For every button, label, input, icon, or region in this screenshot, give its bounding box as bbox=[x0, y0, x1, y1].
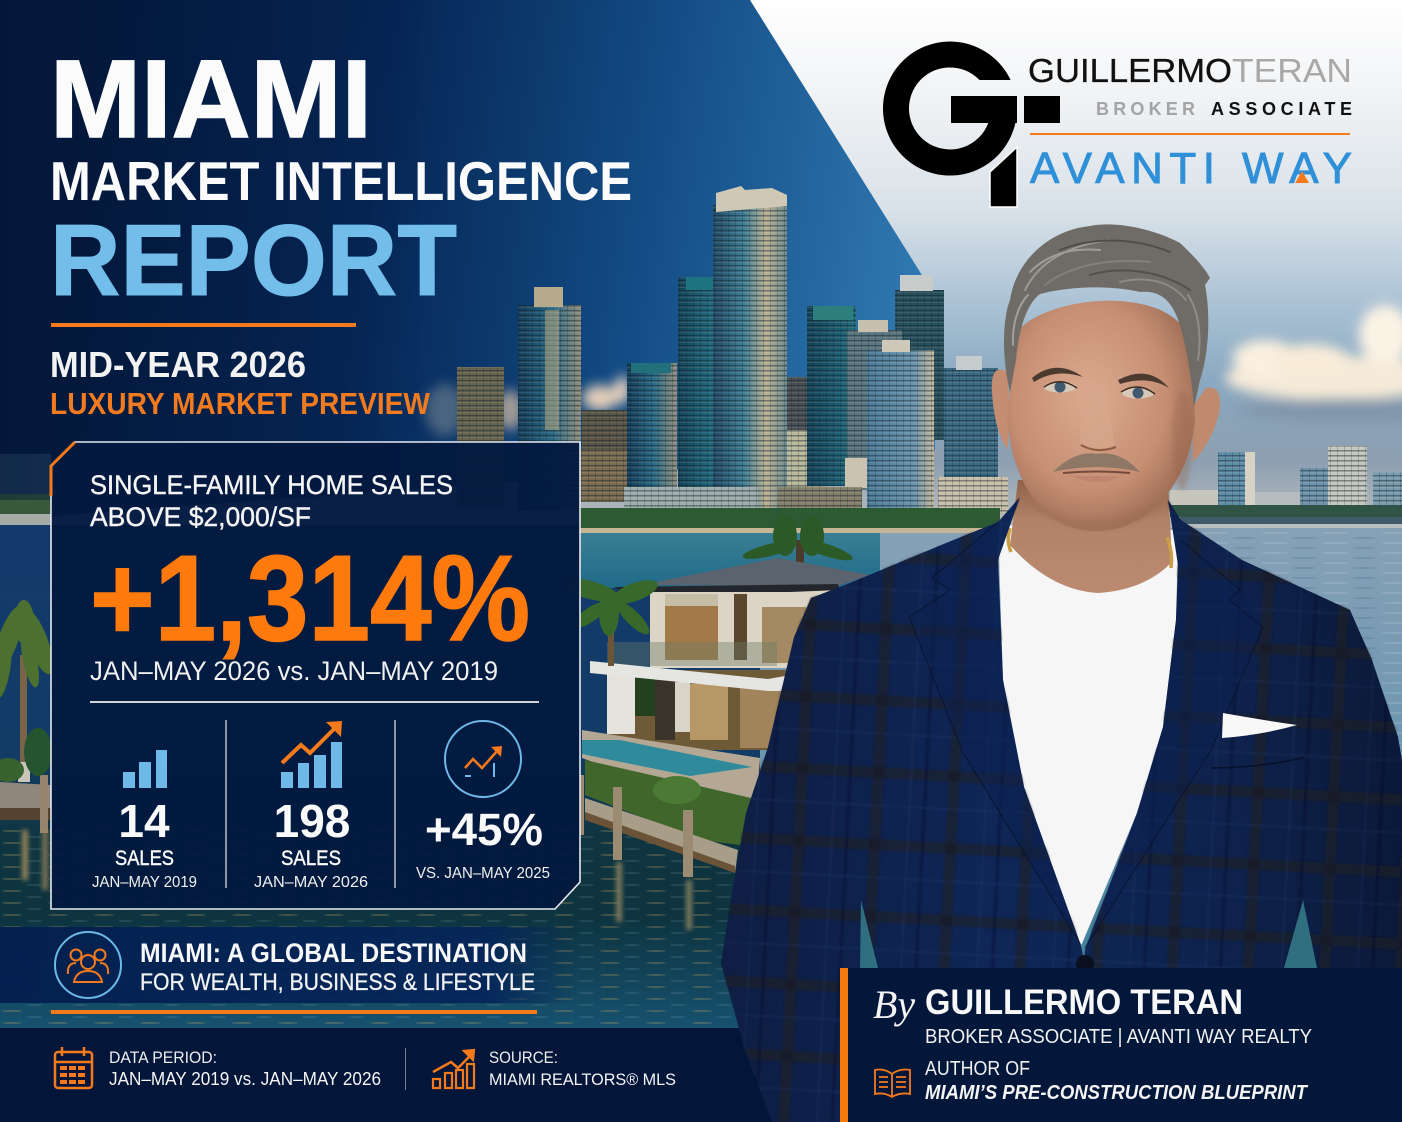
left dark overlay bbox=[0, 0, 420, 500]
clouds bbox=[425, 305, 1402, 436]
palm left of villa bbox=[559, 574, 661, 666]
pocket square bbox=[1222, 713, 1297, 738]
left ear bbox=[992, 370, 1008, 450]
logo: Guillermo Teran, Avanti Way bbox=[883, 42, 1352, 207]
sky background bbox=[0, 0, 1402, 540]
pool bbox=[582, 740, 752, 776]
distant right skyline bbox=[1170, 446, 1402, 524]
stat: 198 sales in 2026: SALES bbox=[281, 847, 341, 870]
logo mark: GT monogram bbox=[883, 42, 1060, 207]
icon: circled trend arrow bbox=[445, 721, 521, 797]
banner: global destination bbox=[0, 927, 575, 1014]
pocket line bbox=[1211, 757, 1305, 768]
panel heading line two: ABOVE $2,000/SF bbox=[90, 502, 311, 532]
waterfront villa bbox=[559, 516, 870, 877]
orange rule bbox=[51, 323, 356, 327]
logo line: associate: ASSOCIATE bbox=[1211, 99, 1352, 119]
villa roof bbox=[640, 558, 870, 586]
brows, eyes, nose and mouth bbox=[1032, 368, 1169, 482]
orange corner accent bbox=[51, 442, 75, 496]
balcony slab bbox=[590, 661, 785, 691]
left dock and palm bbox=[0, 600, 59, 833]
white t-shirt bbox=[998, 525, 1180, 946]
dock bbox=[585, 798, 738, 873]
right water ripples bbox=[1170, 530, 1402, 970]
source label: SOURCE: bbox=[489, 1048, 558, 1067]
villa upper floor bbox=[650, 590, 840, 668]
banner orange rule bbox=[51, 1010, 537, 1014]
lapels bbox=[909, 520, 1263, 948]
stat: 14 sales in 2019: 14 bbox=[118, 795, 170, 847]
water reflections bbox=[22, 830, 692, 930]
luxury preview label: LUXURY MARKET PREVIEW bbox=[50, 386, 431, 421]
author panel bbox=[840, 968, 1402, 1122]
book title: MIAMI’S PRE-CONSTRUCTION BLUEPRINT bbox=[925, 1082, 1309, 1104]
villa lower floor bbox=[607, 670, 797, 750]
face bbox=[1007, 301, 1195, 531]
footer: data period and source bbox=[55, 1047, 676, 1090]
right ear bbox=[1192, 388, 1220, 462]
panel heading: SINGLE-FAMILY HOME SALES bbox=[90, 470, 453, 500]
author background bbox=[847, 968, 1402, 1122]
stat: 14 sales in 2019: JAN–MAY 2019 bbox=[92, 874, 197, 891]
stat: 198 sales in 2026 bbox=[254, 721, 368, 891]
garden bbox=[585, 760, 760, 845]
logo line: broker: BROKER bbox=[1096, 99, 1195, 119]
title: Miami: MIAMI bbox=[50, 38, 372, 161]
icon: small bars bbox=[123, 750, 167, 788]
author of label: AUTHOR OF bbox=[925, 1058, 1030, 1080]
author name: GUILLERMO TERAN bbox=[925, 983, 1243, 1022]
blazer left side bbox=[721, 497, 1100, 1122]
orange side bar bbox=[840, 968, 848, 1122]
author role: BROKER ASSOCIATE | AVANTI WAY REALTY bbox=[925, 1026, 1312, 1048]
facial shading bbox=[1030, 390, 1192, 530]
stat: +45 percent: VS. JAN–MAY 2025 bbox=[416, 865, 550, 882]
plaid texture bbox=[721, 497, 1100, 1122]
panel: single-family sales stats bbox=[51, 442, 580, 909]
left water bbox=[0, 525, 760, 1030]
arm gaps showing water bbox=[860, 900, 1317, 968]
logo wordmark: Teran: TERAN bbox=[1232, 52, 1352, 89]
logo accent triangle bbox=[1295, 171, 1309, 183]
banner background bbox=[0, 927, 575, 1003]
icon: group of people bbox=[55, 932, 121, 998]
logo wordmark: Way: WAY bbox=[1242, 144, 1352, 193]
skyline towers bbox=[457, 186, 1008, 525]
title: report: REPORT bbox=[50, 205, 457, 317]
portrait of man in plaid blazer bbox=[721, 224, 1402, 1122]
footer bar bbox=[0, 1028, 790, 1122]
pool deck bbox=[582, 730, 760, 798]
by script: By bbox=[873, 982, 915, 1027]
stat: 14 sales in 2019 bbox=[92, 750, 197, 891]
source value: MIAMI REALTORS® MLS bbox=[489, 1070, 676, 1089]
banner headline: MIAMI: A GLOBAL DESTINATION bbox=[140, 938, 527, 968]
right water bbox=[760, 528, 1402, 970]
mid-year label: MID-YEAR 2026 bbox=[50, 344, 306, 385]
icon: chart with arrow bbox=[433, 1050, 474, 1088]
hair highlights bbox=[1013, 240, 1200, 360]
stat: 198 sales in 2026: JAN–MAY 2026 bbox=[254, 874, 368, 891]
title block bbox=[50, 38, 632, 421]
jacket button bbox=[1076, 955, 1094, 973]
panel background bbox=[51, 442, 580, 909]
data period label: DATA PERIOD: bbox=[109, 1048, 217, 1067]
left water ripples bbox=[0, 830, 760, 1030]
stat: +45 percent: +45% bbox=[425, 804, 543, 855]
subtitle: market intelligence: MARKET INTELLIGENCE bbox=[50, 150, 632, 212]
stat: +45 percent bbox=[416, 721, 550, 882]
neck bbox=[1010, 480, 1172, 593]
shoreline foliage bbox=[0, 494, 1000, 533]
faint buildings left bbox=[0, 454, 51, 494]
necklace bbox=[1008, 528, 1172, 568]
stat: 14 sales in 2019: SALES bbox=[115, 847, 174, 870]
headline figure: +1,314% bbox=[90, 530, 530, 666]
stat: 198 sales in 2026: 198 bbox=[274, 795, 350, 847]
icon: calendar bbox=[55, 1047, 92, 1088]
palms behind villa bbox=[741, 516, 854, 570]
blazer right side bbox=[1070, 500, 1402, 1122]
comparison period: JAN–MAY 2026 vs. JAN–MAY 2019 bbox=[90, 656, 498, 686]
logo wordmark: Avanti: AVANTI bbox=[1030, 144, 1215, 193]
data period value: JAN–MAY 2019 vs. JAN–MAY 2026 bbox=[109, 1069, 381, 1089]
hair bbox=[1004, 224, 1210, 408]
icon: open book bbox=[875, 1070, 910, 1097]
dark blue diagonal sky bbox=[0, 0, 935, 520]
balcony glass bbox=[607, 642, 777, 666]
logo wordmark: Guillermo: GUILLERMO bbox=[1028, 52, 1232, 89]
central bay bbox=[580, 532, 880, 588]
banner subhead: FOR WEALTH, BUSINESS & LIFESTYLE bbox=[140, 969, 535, 996]
icon: rising bars with arrow bbox=[281, 721, 342, 788]
